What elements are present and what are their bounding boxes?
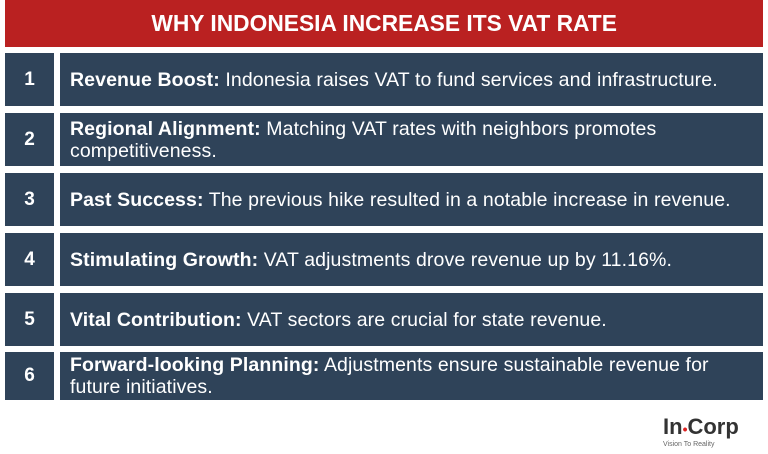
row 2: competitiveness. <box>70 140 217 162</box>
row 5 <box>5 293 763 346</box>
row 1: Revenue Boost: Indonesia raises VAT to fund services and infrastructure. <box>70 68 718 90</box>
row 3: Past Success: The previous hike resulted in a notable increase in revenue. <box>70 188 731 210</box>
logo: Vision To Reality <box>663 441 714 448</box>
row 2 <box>5 113 763 166</box>
row 2: Regional Alignment: Matching VAT rates with neighbors promotes <box>70 118 656 140</box>
row 6 <box>5 352 763 400</box>
row 2: 2 <box>24 128 35 150</box>
row 4: Stimulating Growth: VAT adjustments drove revenue up by 11.16%. <box>70 248 672 270</box>
row 3: 3 <box>24 188 35 210</box>
row 6: Forward-looking Planning: Adjustments ensure sustainable revenue for <box>70 354 709 376</box>
row 5: Vital Contribution: VAT sectors are crucial for state revenue. <box>70 308 607 330</box>
title <box>5 0 763 47</box>
logo: In•Corp <box>663 414 739 439</box>
row 4 <box>5 233 763 286</box>
row 1: 1 <box>24 68 35 90</box>
row 3 <box>5 173 763 226</box>
row 5: 5 <box>24 308 35 330</box>
row 1 <box>5 53 763 106</box>
row 6: 6 <box>24 365 35 386</box>
title: WHY INDONESIA INCREASE ITS VAT RATE <box>151 10 617 36</box>
row 6: future initiatives. <box>70 376 213 398</box>
row 4: 4 <box>24 248 35 270</box>
